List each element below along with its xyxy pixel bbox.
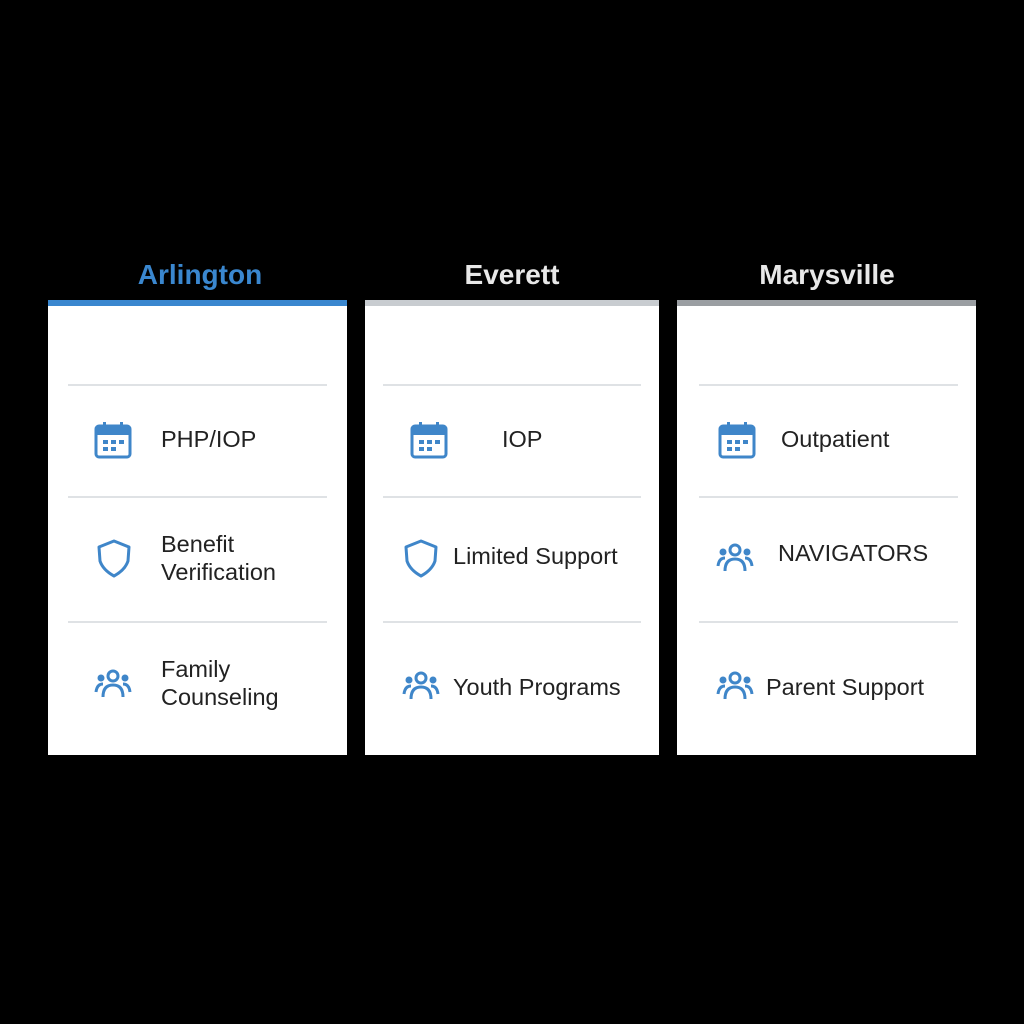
text: Youth Programs: Youth Programs: [453, 674, 621, 700]
panel: Everett: [365, 300, 659, 755]
panel: Arlington: [48, 300, 347, 755]
icon: people: [716, 544, 754, 571]
text: IOP: IOP: [502, 426, 542, 452]
heading: Marysville: Marysville: [759, 259, 895, 290]
icon: people: [402, 672, 440, 699]
icon: people: [94, 670, 132, 697]
text: Family Counseling: Family: [161, 656, 230, 682]
text: Family Counseling: [161, 656, 279, 710]
icon: people: [716, 672, 754, 699]
text: Outpatient: Outpatient: [781, 426, 889, 452]
text: Benefit Verification: Benefit: [161, 531, 234, 557]
panel: Marysville: [677, 300, 976, 755]
heading: Arlington: Arlington: [138, 259, 262, 290]
icon: calendar: [94, 422, 132, 458]
icon: calendar: [410, 422, 448, 458]
text: NAVIGATORS: NAVIGATORS: [778, 540, 928, 566]
icon: shield: [98, 540, 130, 578]
text: PHP/IOP: PHP/IOP: [161, 426, 256, 452]
text: Benefit Verification: Verification: [161, 559, 276, 585]
text: Limited Support: Limited Support: [453, 543, 618, 569]
icon: shield: [404, 540, 438, 578]
text: Benefit Verification: [161, 531, 276, 585]
icon: calendar: [718, 422, 756, 458]
text: Parent Support: Parent Support: [766, 674, 924, 700]
heading: Everett: Everett: [465, 259, 559, 290]
text: Family Counseling: Counseling: [161, 684, 279, 710]
